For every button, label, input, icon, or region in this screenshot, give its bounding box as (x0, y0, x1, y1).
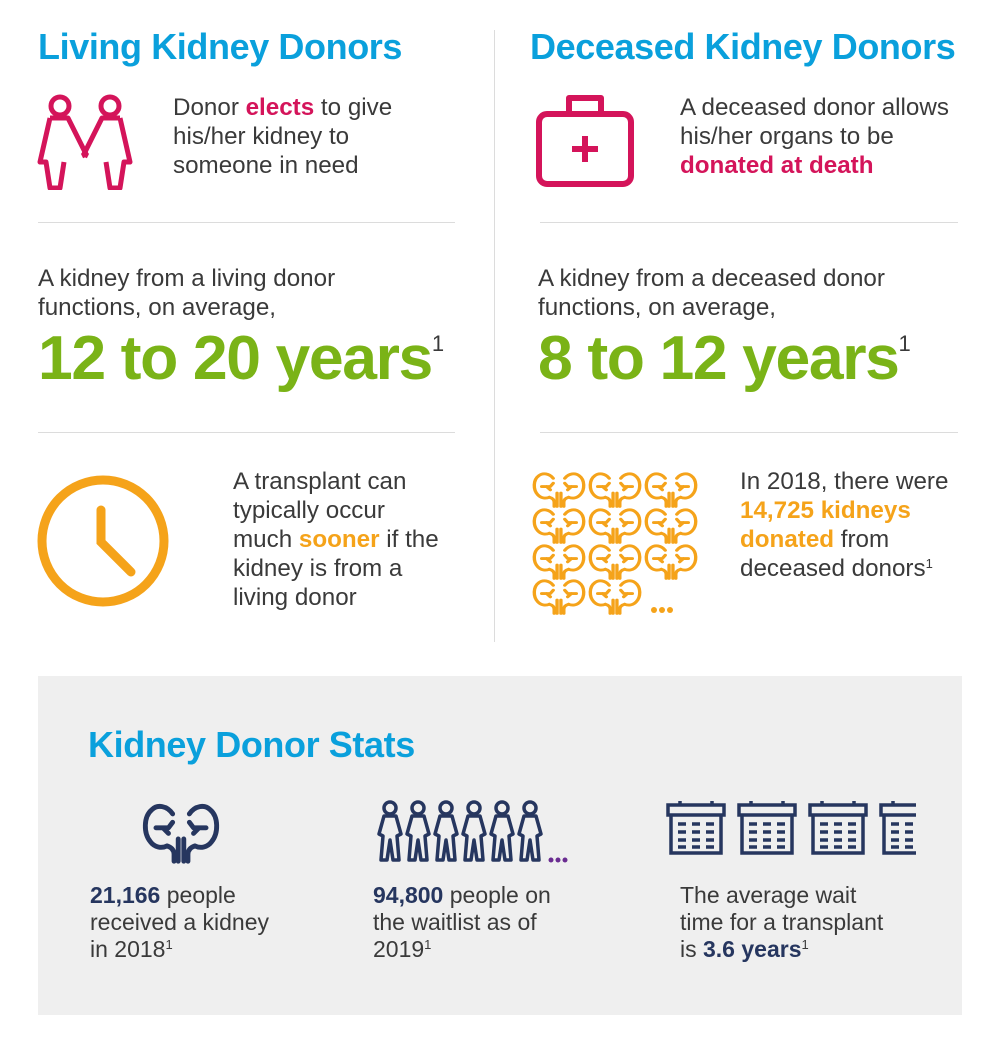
heading: deceased donors: Deceased Kidney Donors (530, 26, 955, 67)
text: living function: functions, on average, (38, 294, 276, 321)
text: transplant sooner: living donor (233, 584, 357, 611)
text: 94,800: 20191 (373, 936, 431, 962)
text: donor elects: his/her kidney to (173, 123, 349, 150)
text: transplant sooner (233, 468, 439, 611)
text: deceased donor allows: donated at death (680, 152, 874, 179)
text: wait time (680, 882, 884, 962)
text: donor elects: Donor elects to give (173, 94, 392, 121)
text: transplant sooner: much sooner if the (233, 526, 439, 553)
text: transplant sooner: typically occur (233, 497, 385, 524)
text: 94,800: 94,800 people on (373, 882, 551, 908)
text: donor elects: someone in need (173, 152, 359, 179)
text: 94,800: the waitlist as of (373, 909, 537, 935)
text: deceased function: A kidney from a deceased donor (538, 265, 885, 292)
text: 14,725 kidneys: In 2018, there were (740, 468, 948, 495)
text: 14,725 kidneys: 14,725 kidneys (740, 497, 911, 524)
text: 14,725 kidneys (740, 468, 948, 582)
icon: two people holding hands (38, 94, 132, 190)
text: 21,166 (90, 882, 269, 962)
icon: medical bag (536, 95, 634, 187)
text: transplant sooner: A transplant can (233, 468, 406, 495)
text: donor elects (173, 94, 392, 179)
text: living function: A kidney from a living donor (38, 265, 335, 292)
heading: living donors: Living Kidney Donors (38, 26, 402, 67)
icon: navy kidney (142, 804, 220, 864)
icon: people row (377, 800, 568, 862)
text: 14,725 kidneys: deceased donors1 (740, 555, 933, 582)
text: deceased donor allows (680, 94, 949, 179)
text: 21,166: received a kidney (90, 909, 269, 935)
text: wait time: is 3.6 years1 (680, 936, 809, 962)
text: wait time: time for a transplant (680, 909, 883, 935)
text: deceased donor allows: A deceased donor allows (680, 94, 949, 121)
text: deceased donor allows: his/her organs to be (680, 123, 894, 150)
divider vertical (494, 30, 495, 642)
text: deceased function: functions, on average, (538, 294, 776, 321)
text: living function (38, 265, 335, 321)
text: 94,800 (373, 882, 551, 962)
big stat: 12 to 20 years: 12 to 20 years1 (38, 323, 444, 393)
text: deceased function (538, 265, 885, 321)
text: 21,166: 21,166 people (90, 882, 236, 908)
icon: calendars (666, 801, 916, 855)
icon: clock (38, 476, 168, 606)
text: 14,725 kidneys: donated from (740, 526, 889, 553)
panel: kidney donor stats (38, 676, 962, 1015)
big stat: 8 to 12 years: 8 to 12 years1 (538, 323, 911, 393)
text: 21,166: in 20181 (90, 936, 173, 962)
heading: stats: Kidney Donor Stats (88, 724, 415, 765)
text: wait time: The average wait (680, 882, 856, 908)
text: transplant sooner: kidney is from a (233, 555, 402, 582)
icon: kidney grid (532, 472, 698, 615)
